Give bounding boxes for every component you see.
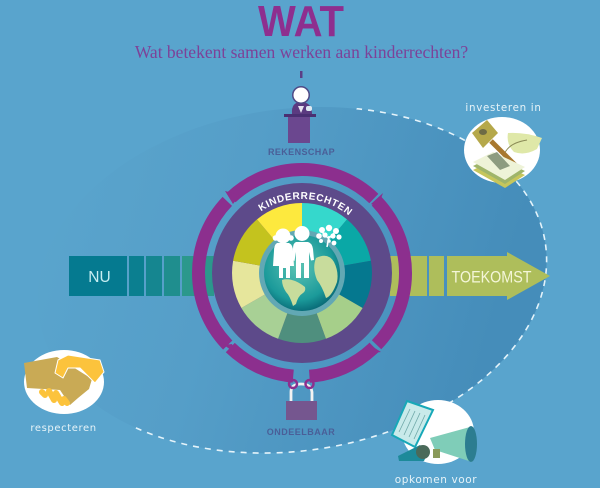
icon: speaker at podium (284, 71, 316, 143)
timeline left: NU: NU (88, 269, 111, 286)
icon: handshake (24, 350, 104, 414)
wedge wheel (232, 203, 372, 343)
icon: tree (316, 225, 342, 247)
dark purple disc (212, 183, 392, 363)
heading: kinderrechten arc: KINDERRECHTEN (258, 192, 352, 216)
label: opkomen voor: opkomen voor (395, 474, 477, 486)
timeline right: TOEKOMST arrow (390, 252, 550, 300)
large ellipse (136, 107, 548, 454)
purple circular arrows (156, 127, 448, 419)
label: investeren in: investeren in (465, 102, 542, 114)
icon: spade, plant and money (464, 117, 542, 188)
icon: children (273, 226, 314, 278)
icon: megaphone, paper and whistle (392, 400, 477, 464)
globe (259, 230, 345, 316)
icon: padlock (286, 380, 317, 420)
label: rekenschap: REKENSCHAP (268, 147, 335, 157)
timeline right: TOEKOMST arrow: TOEKOMST (452, 268, 532, 286)
timeline left: NU (69, 256, 214, 296)
label: ondeelbaar: ONDEELBAAR (267, 427, 335, 437)
label: respecteren: respecteren (30, 423, 97, 434)
subtitle: Wat betekent samen werken aan kinderrechten? (135, 42, 468, 62)
